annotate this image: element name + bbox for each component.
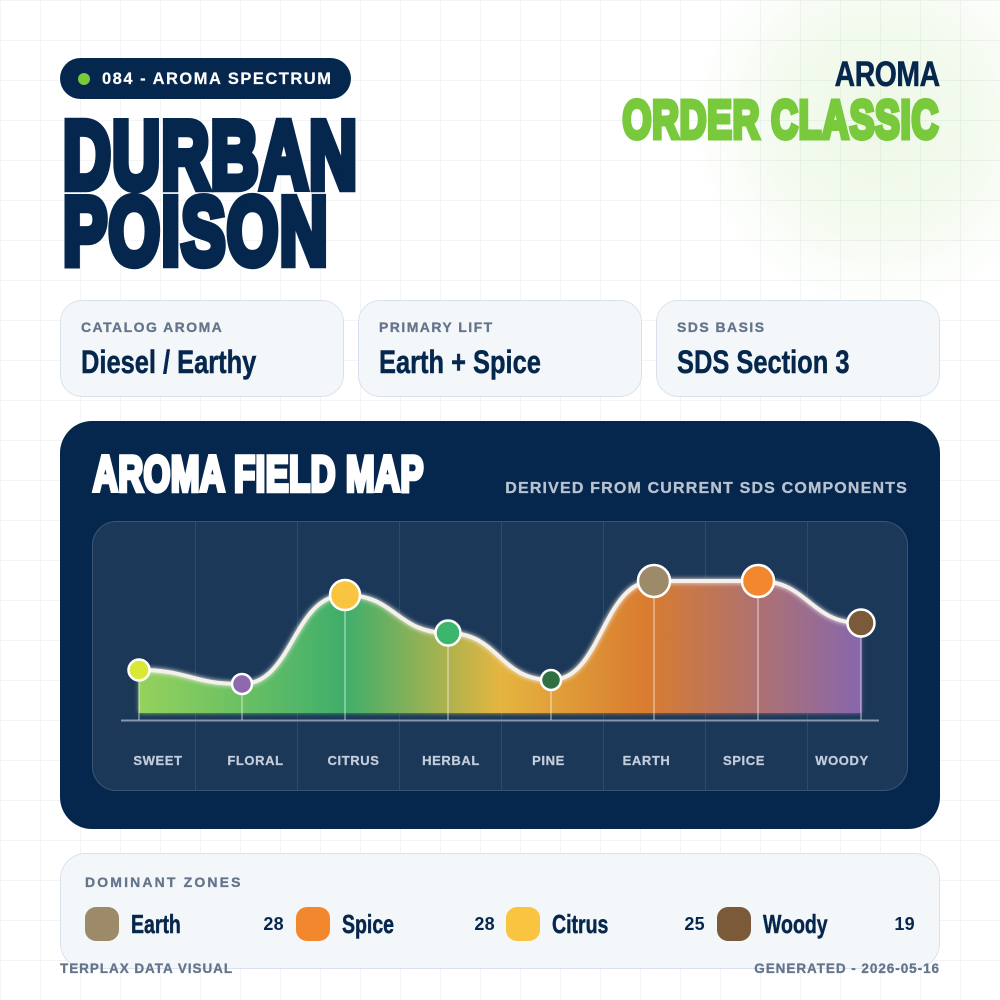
card value: SDS Section 3 bbox=[677, 344, 849, 380]
card label: SDS BASIS bbox=[677, 319, 766, 335]
chart background bbox=[92, 522, 908, 790]
category labels: HERBAL bbox=[422, 753, 480, 768]
zone: spice bbox=[296, 907, 495, 941]
category labels: FLORAL bbox=[227, 753, 284, 768]
icon: green dot bbox=[78, 73, 90, 85]
card label: CATALOG AROMA bbox=[81, 319, 223, 335]
drop lines bbox=[139, 581, 861, 720]
aroma kicker: AROMA bbox=[835, 55, 940, 94]
zone: woody: 19 bbox=[894, 914, 915, 934]
zone: spice: Spice bbox=[342, 909, 394, 939]
category labels: SPICE bbox=[723, 753, 765, 768]
panel: dominant zones bbox=[60, 853, 940, 969]
zone: earth bbox=[85, 907, 284, 941]
card: primary lift bbox=[358, 300, 642, 397]
footer right: GENERATED - 2026-05-16 bbox=[754, 961, 940, 976]
card label: PRIMARY LIFT bbox=[379, 319, 494, 335]
curve bbox=[139, 581, 861, 684]
zones heading: DOMINANT ZONES bbox=[85, 874, 243, 890]
points bbox=[128, 565, 874, 694]
card: sds basis bbox=[656, 300, 940, 397]
panel subtitle: DERIVED FROM CURRENT SDS COMPONENTS bbox=[505, 480, 908, 497]
category labels: SWEET bbox=[133, 753, 183, 768]
card value: Diesel / Earthy bbox=[81, 344, 256, 380]
zone: earth: Earth bbox=[131, 909, 181, 939]
zone: citrus: Citrus bbox=[552, 909, 608, 939]
footer left: TERPLAX DATA VISUAL bbox=[60, 961, 233, 976]
badge text: 084 - AROMA SPECTRUM bbox=[102, 70, 332, 88]
badge: aroma spectrum bbox=[60, 58, 351, 99]
zone: woody: Woody bbox=[763, 909, 828, 939]
zone: citrus bbox=[506, 907, 705, 941]
zone: woody bbox=[717, 907, 915, 941]
category labels: CITRUS bbox=[328, 753, 380, 768]
title bbox=[63, 102, 358, 284]
category labels bbox=[133, 753, 869, 768]
category labels: EARTH bbox=[623, 753, 670, 768]
area bbox=[139, 581, 861, 713]
category labels: WOODY bbox=[815, 753, 869, 768]
card value: Earth + Spice bbox=[379, 344, 541, 380]
zone: spice: 28 bbox=[474, 914, 495, 934]
order classic heading: ORDER CLASSIC bbox=[623, 90, 940, 150]
title: DURBAN bbox=[63, 102, 358, 208]
zone: earth: 28 bbox=[263, 914, 284, 934]
zone: citrus: 25 bbox=[684, 914, 705, 934]
axis bbox=[121, 720, 879, 722]
card: catalog aroma bbox=[60, 300, 344, 397]
panel: aroma field map bbox=[60, 421, 940, 829]
panel heading: AROMA FIELD MAP bbox=[93, 446, 424, 502]
category labels: PINE bbox=[532, 753, 565, 768]
title: POISON bbox=[63, 178, 329, 284]
